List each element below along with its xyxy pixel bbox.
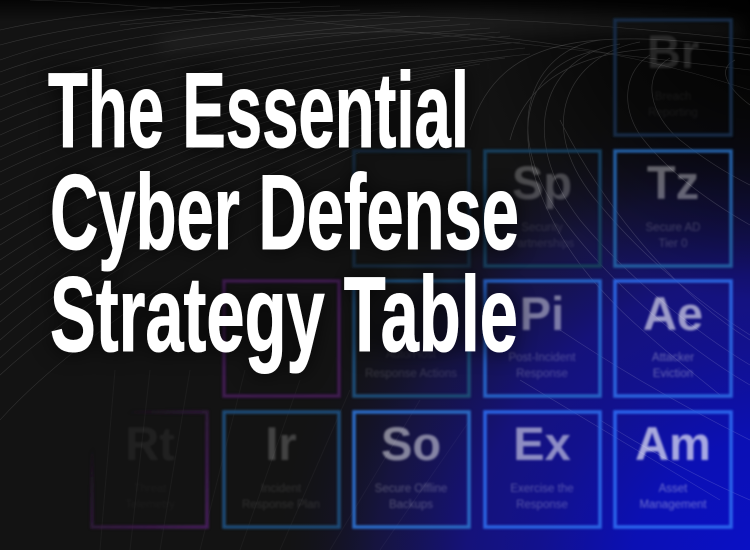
cell: Tz Secure AD Tier 0: Tier 0: [659, 238, 687, 250]
orbit arcs: [470, 39, 750, 500]
cell: So Secure Offline Backups: Backups: [389, 499, 433, 511]
cell: Sp Security Partnerships: Sp: [512, 156, 572, 209]
cell: Sp Security Partnerships: [485, 151, 600, 266]
cell: Am Asset Management: Asset: [659, 483, 688, 495]
cell: hidden magenta: [224, 281, 339, 396]
cell: Pi Post-Incident Response: [485, 281, 600, 396]
cell: Am Asset Management: Am: [635, 417, 711, 470]
cell: Tz Secure AD Tier 0: [615, 151, 731, 266]
cell: Br Breach Reporting: Reporting: [648, 107, 698, 119]
cell: Response Actions: Response Actions: [365, 368, 457, 380]
cell: Ir Incident Response Plan: Incident: [261, 483, 302, 495]
cell: Ae Attacker Eviction: Attacker: [652, 352, 694, 364]
cell: Ir Incident Response Plan: [224, 412, 339, 527]
cell: Ex Exercise the Response: Exercise the: [510, 483, 574, 495]
cell: Ae Attacker Eviction: Ae: [643, 287, 703, 340]
cell: Sp Security Partnerships: Security: [521, 222, 563, 234]
cell: Sp Security Partnerships: Partnerships: [510, 238, 575, 250]
cell: Ex Exercise the Response: [485, 412, 600, 527]
cell: Br Breach Reporting: Br: [647, 25, 699, 78]
cell: Am Asset Management: Management: [639, 499, 707, 511]
cell: Tz Secure AD Tier 0: Secure AD: [646, 222, 700, 234]
panel: periodic strategy table: [92, 20, 731, 527]
cell: Response Actions: [354, 281, 469, 396]
cell: So Secure Offline Backups: [354, 412, 469, 527]
cell: Am Asset Management: [615, 412, 731, 527]
cell: Ir Incident Response Plan: Response Plan: [242, 499, 320, 511]
cell: Ex Exercise the Response: Ex: [513, 417, 571, 470]
cell: Rt Threat Telemetry: Rt: [125, 417, 175, 470]
cell: hidden row 2 column 3: [354, 151, 469, 266]
cell: Br Breach Reporting: Breach: [655, 91, 691, 103]
cell: Rt Threat Telemetry: Telemetry: [125, 499, 175, 511]
cell: Pi Post-Incident Response: Post-Incident: [508, 352, 576, 364]
cell: So Secure Offline Backups: Secure Offline: [375, 483, 447, 495]
cell: Tz Secure AD Tier 0: Tz: [647, 156, 699, 209]
cell: Rt Threat Telemetry: Threat: [133, 483, 167, 495]
cell: Response Actions: Auto/Host: [386, 349, 437, 361]
faint vertical streaks lower area: [100, 370, 470, 550]
cell: Ae Attacker Eviction: [615, 281, 731, 396]
cell: Rt Threat Telemetry: [92, 412, 207, 527]
light streaks: [0, 0, 750, 420]
title: [48, 50, 519, 374]
cell: Br Breach Reporting: [615, 20, 731, 135]
cell: Ir Incident Response Plan: Ir: [265, 417, 297, 470]
cell: Ex Exercise the Response: Response: [516, 499, 568, 511]
cell: Pi Post-Incident Response: Pi: [520, 287, 564, 340]
title: The Essential: [48, 50, 469, 170]
cell: Pi Post-Incident Response: Response: [516, 368, 568, 380]
cell: Ae Attacker Eviction: Eviction: [653, 368, 693, 380]
cell: So Secure Offline Backups: So: [381, 417, 441, 470]
